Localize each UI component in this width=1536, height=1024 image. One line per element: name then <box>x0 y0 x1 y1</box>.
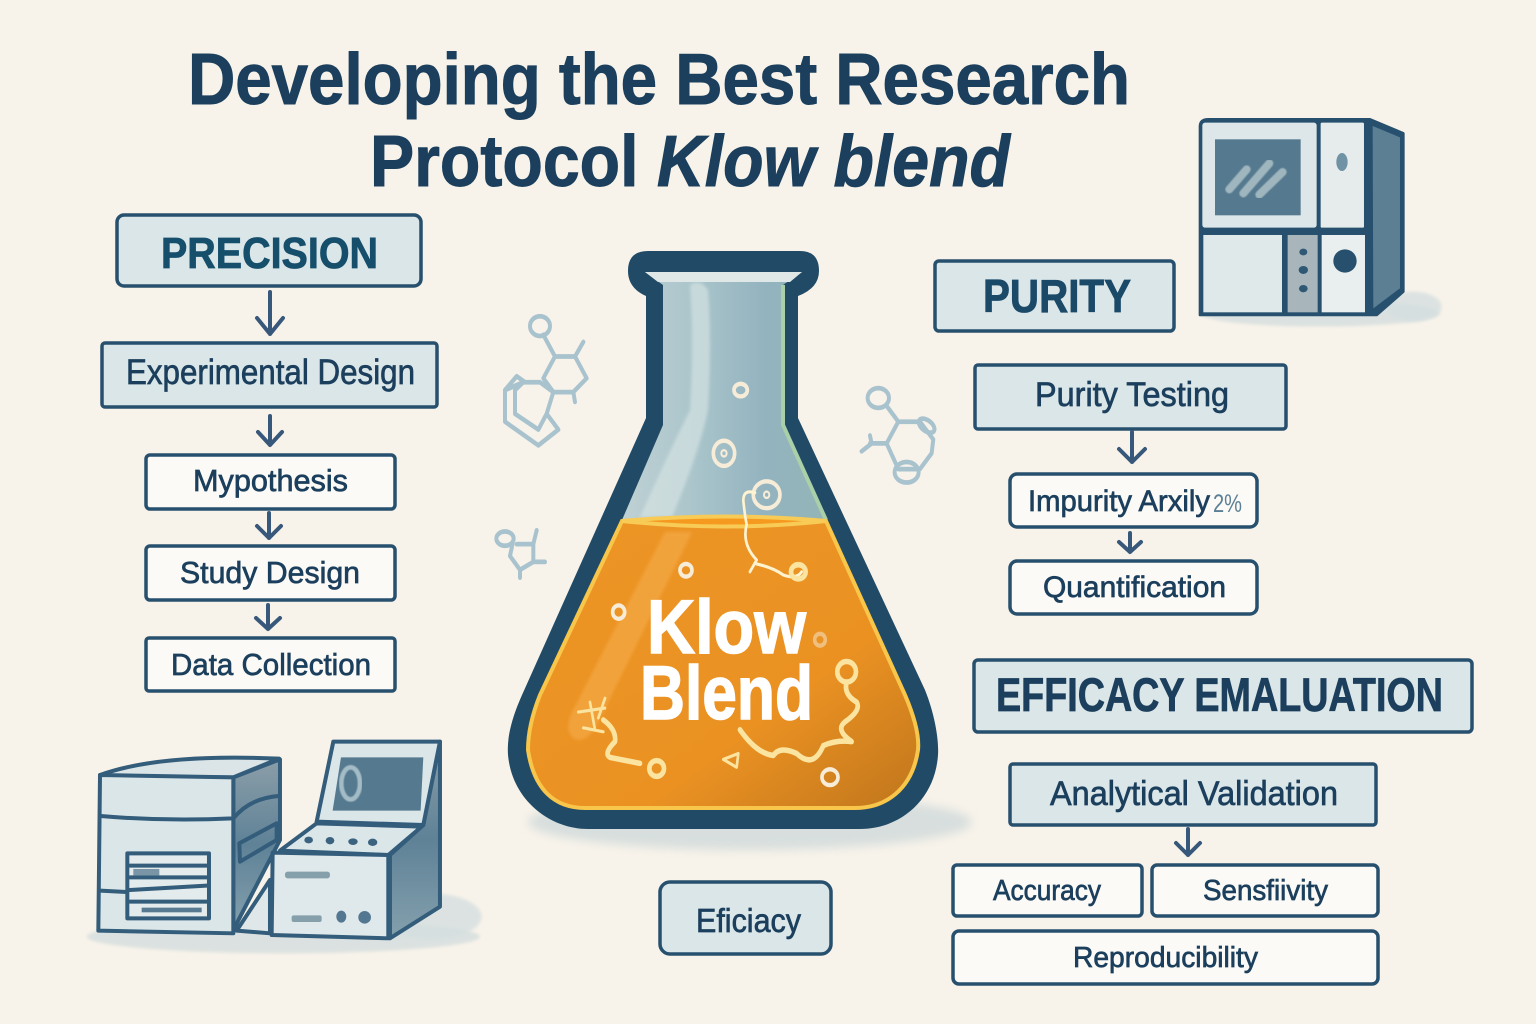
box: reproducibility <box>953 931 1378 984</box>
box: efficacy: Eficiacy <box>696 902 801 939</box>
panel: precision <box>102 215 437 691</box>
box: impurity: Impurity Arxily <box>1028 485 1210 518</box>
box: impurity: 2% <box>1213 490 1242 518</box>
title: Developing the Best Research <box>188 40 1130 120</box>
arrow: purity testing to impurity <box>1119 432 1145 462</box>
flask <box>508 251 938 829</box>
box: study design <box>146 546 395 600</box>
icon: molecule small left <box>496 530 545 578</box>
box: sensitivity <box>1152 865 1378 916</box>
box: efficacy <box>660 882 831 954</box>
box: data collection: Data Collection <box>171 647 371 682</box>
panel: purity <box>935 261 1286 614</box>
box: accuracy: Accuracy <box>993 875 1101 907</box>
box: impurity <box>1010 474 1257 527</box>
box: experimental design: Experimental Design <box>126 353 415 392</box>
heading: efficacy emalluation <box>974 660 1472 732</box>
flask liquid <box>528 517 918 808</box>
title <box>188 40 1130 202</box>
box: reproducibility: Reproducibility <box>1073 942 1258 974</box>
flask label: Klow <box>647 585 807 670</box>
icon: molecule top left <box>505 316 587 445</box>
box: analytical validation: Analytical Validation <box>1050 775 1338 813</box>
icon: right lab instrument <box>1200 119 1442 327</box>
heading: purity: PURITY <box>983 270 1131 322</box>
flask label: Blend <box>640 651 813 736</box>
box: data collection <box>146 638 395 691</box>
box: mypothesis: Mypothesis <box>193 463 348 498</box>
box: quantification <box>1010 561 1257 614</box>
box: purity testing <box>975 365 1286 429</box>
icon: left lab instruments <box>87 742 482 953</box>
box: sensitivity: Sensfiivity <box>1203 875 1328 907</box>
arrow: impurity to quantification <box>1119 533 1141 552</box>
box: experimental design <box>102 343 437 407</box>
box: purity testing: Purity Testing <box>1035 376 1229 414</box>
box: analytical validation <box>1010 764 1376 825</box>
flask glass <box>622 272 826 520</box>
heading: purity <box>935 261 1174 331</box>
box: quantification: Quantification <box>1043 571 1226 604</box>
flask outline <box>508 251 938 829</box>
heading: precision: PRECISION <box>161 229 378 278</box>
box: study design: Study Design <box>180 555 360 590</box>
arrow: study design to data collection <box>256 605 280 629</box>
title: Protocol Klow blend <box>370 122 1012 202</box>
panel: efficacy evaluation <box>953 660 1472 984</box>
arrow: experimental design to mypothesis <box>258 416 282 445</box>
box: accuracy <box>953 865 1142 916</box>
flask shadow <box>528 794 972 850</box>
arrow: precision to experimental design <box>257 292 283 334</box>
flask label <box>640 585 813 736</box>
box: mypothesis <box>146 455 395 509</box>
heading: precision <box>117 215 421 286</box>
arrow: mypothesis to study design <box>257 513 281 538</box>
icon: molecule right <box>862 388 936 483</box>
arrow: validation to metrics <box>1176 829 1200 855</box>
flask bubbles and strands <box>578 384 858 785</box>
